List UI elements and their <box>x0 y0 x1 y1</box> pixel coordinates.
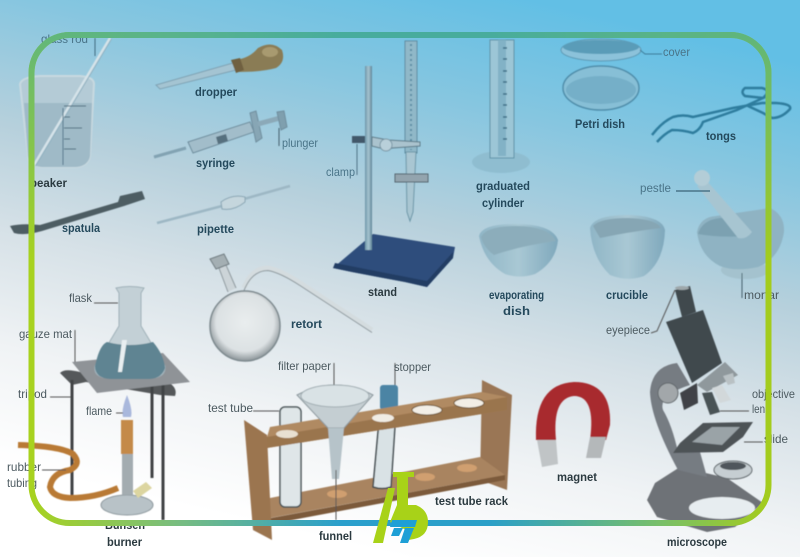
icon: microscope <box>647 286 763 532</box>
label: test tube rack: test tube rack <box>435 494 508 508</box>
label: evaporating dish: evaporating <box>489 288 544 302</box>
label: spatula: spatula <box>62 221 100 235</box>
label: pipette: pipette <box>197 222 234 236</box>
label: funnel: funnel <box>319 529 352 543</box>
icon: dropper <box>156 44 283 89</box>
label: objective lens: objective <box>752 387 795 401</box>
label: rubber tubing <box>7 460 41 490</box>
label: Bunsen burner: burner <box>107 535 142 549</box>
label: gauze mat: gauze mat <box>19 327 73 341</box>
label: dropper: dropper <box>195 85 237 99</box>
label: plunger: plunger <box>282 136 318 150</box>
icon: graduated cylinder <box>472 40 530 173</box>
label: magnet: magnet <box>557 470 597 484</box>
icon: tongs <box>652 88 790 142</box>
label: tripod: tripod <box>18 387 47 401</box>
icon: spatula <box>10 191 145 234</box>
icon: crucible <box>590 215 665 279</box>
label: evaporating dish: dish <box>503 304 530 318</box>
label: microscope: microscope <box>667 535 727 549</box>
label: Bunsen burner <box>105 518 145 549</box>
label: flame: flame <box>86 404 112 418</box>
icon: stand with burette <box>333 41 455 287</box>
icon: retort <box>210 254 372 361</box>
label: graduated cylinder: graduated <box>476 179 530 193</box>
icon: evaporating dish <box>479 224 558 276</box>
label: retort: retort <box>291 317 322 331</box>
logo <box>373 472 428 543</box>
label: beaker: beaker <box>30 176 67 190</box>
label: tongs: tongs <box>706 129 736 143</box>
label: glass rod: glass rod <box>41 32 88 46</box>
label: stand: stand <box>368 285 397 299</box>
label: mortar: mortar <box>744 288 779 302</box>
icon: pipette <box>157 186 290 223</box>
icon: mortar and pestle <box>694 170 784 298</box>
label: eyepiece: eyepiece <box>606 323 650 337</box>
label: objective lens <box>752 387 795 416</box>
label: syringe: syringe <box>196 156 235 170</box>
label: objective lens: lens <box>752 402 770 416</box>
label: pestle: pestle <box>640 181 671 195</box>
icon: magnet <box>536 382 610 467</box>
label: pestle <box>640 181 710 195</box>
icon: Petri dish <box>561 39 662 110</box>
label: graduated cylinder: cylinder <box>482 196 524 210</box>
label: stopper: stopper <box>394 360 431 374</box>
icon: flask on tripod and Bunsen burner <box>18 286 190 520</box>
label: clamp: clamp <box>326 165 355 179</box>
label: slide: slide <box>764 432 788 446</box>
label: graduated cylinder <box>476 179 530 210</box>
label: rubber tubing: rubber <box>7 460 41 474</box>
label: cover: cover <box>663 45 690 59</box>
label: crucible: crucible <box>606 288 648 302</box>
icon: syringe <box>154 111 287 157</box>
label: flask: flask <box>69 291 93 305</box>
icon: test tube rack with funnel and tubes <box>244 363 512 540</box>
icon: beaker with glass rod <box>20 38 112 167</box>
label: Petri dish: Petri dish <box>575 117 625 131</box>
label: filter paper: filter paper <box>278 359 331 373</box>
label: Bunsen burner: Bunsen <box>105 518 145 532</box>
label: rubber tubing: tubing <box>7 476 37 490</box>
label: test tube: test tube <box>208 401 253 415</box>
label: evaporating dish <box>489 288 544 318</box>
